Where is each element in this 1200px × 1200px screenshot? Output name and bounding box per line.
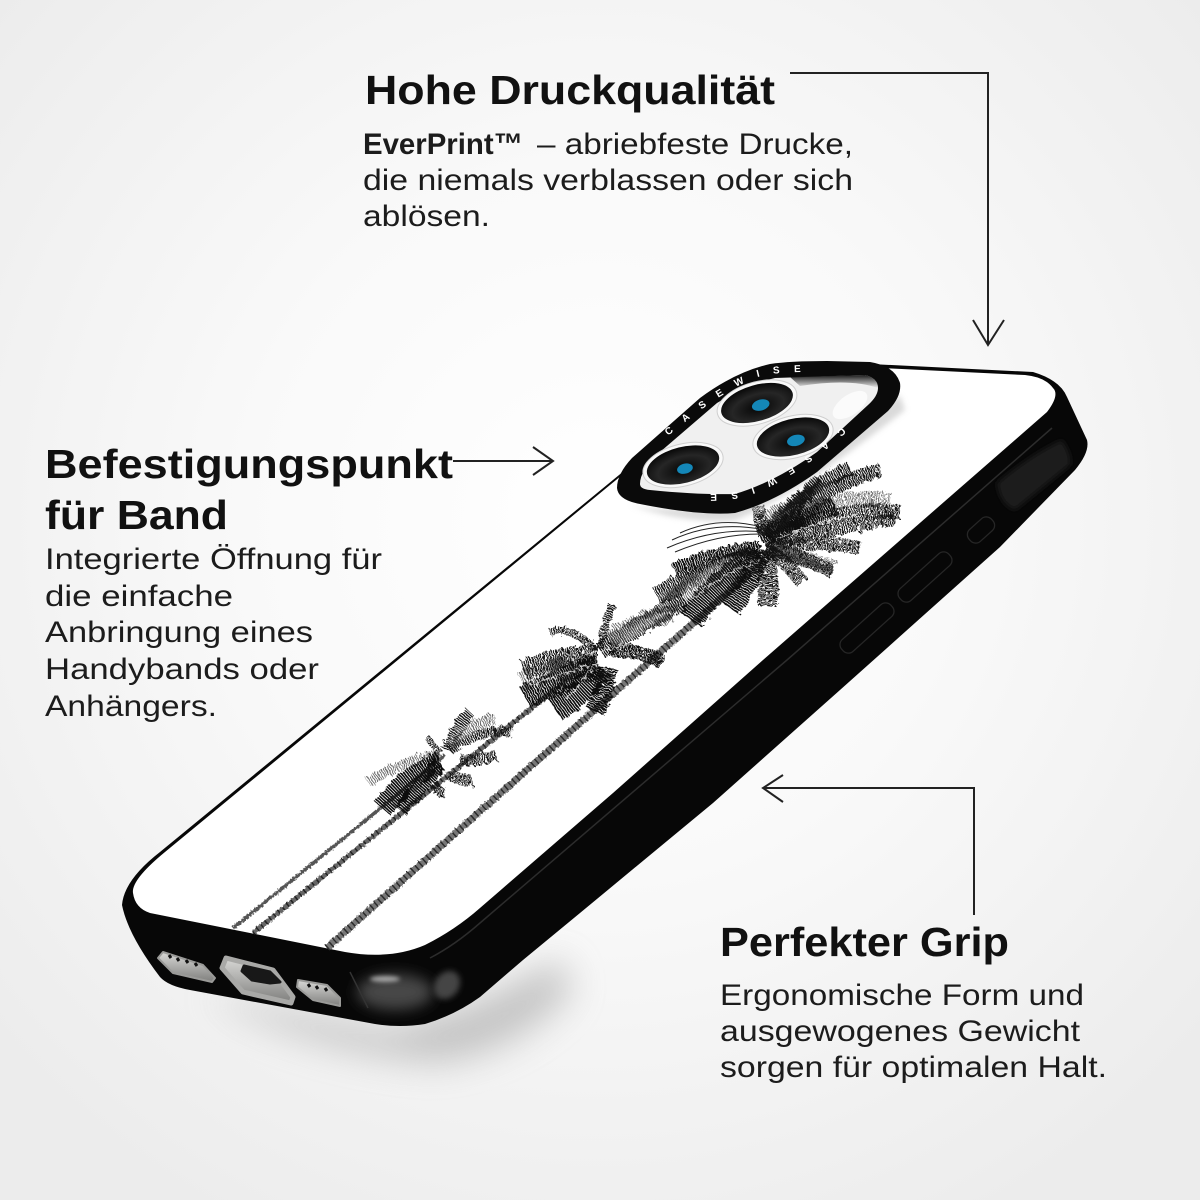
flash <box>828 385 872 425</box>
bottom ports <box>158 952 340 1006</box>
palm tree: top, thin left fronds <box>667 523 765 552</box>
arrow: to side of case <box>763 775 974 915</box>
heading: für Band <box>45 492 228 538</box>
body text <box>720 979 1107 1084</box>
callout: Hohe Druckqualität <box>363 67 853 233</box>
usb port <box>222 958 293 1003</box>
body text: Anhängers. <box>45 690 217 723</box>
camera bump <box>617 361 906 524</box>
heading: Hohe Druckqualität <box>365 67 775 113</box>
bump ring <box>617 361 900 514</box>
brand text bottom: CASEWISE <box>710 428 845 501</box>
corner highlight <box>350 966 465 1010</box>
brand text top: CASEWISE <box>665 365 800 434</box>
side buttons <box>837 514 998 656</box>
body text: ablösen. <box>363 200 490 233</box>
rim highlight <box>430 428 1052 958</box>
heading <box>45 441 453 538</box>
phone case illustration <box>122 361 1088 1078</box>
body text: EverPrint™ <box>363 128 523 161</box>
phone shadow <box>205 960 572 1062</box>
bump window <box>640 375 878 494</box>
lens left <box>638 435 728 495</box>
body text: – abriebfeste Drucke, <box>537 128 853 161</box>
body text <box>45 543 382 723</box>
body text: Integrierte Öffnung für <box>45 543 382 576</box>
arrow: to top edge <box>790 73 1004 345</box>
heading: Perfekter Grip <box>720 919 1009 965</box>
white back panel <box>133 368 1055 955</box>
arrow: to camera bump <box>453 447 553 475</box>
palm tree: middle <box>522 600 685 712</box>
window top shade <box>790 375 878 388</box>
body text: Handybands oder <box>45 653 319 686</box>
body text: sorgen für optimalen Halt. <box>720 1051 1107 1084</box>
heading: Befestigungspunkt <box>45 441 453 487</box>
body text: die niemals verblassen oder sich <box>363 164 853 197</box>
body text: Anbringung eines <box>45 616 313 649</box>
lens top <box>712 372 802 434</box>
callout: Perfekter Grip <box>720 919 1107 1084</box>
bump shadow <box>630 395 905 521</box>
case body <box>122 362 1088 1026</box>
right speaker <box>297 980 340 1006</box>
lens right <box>748 407 838 467</box>
body text: Ergonomische Form und <box>720 979 1084 1012</box>
body text: ausgewogenes Gewicht <box>720 1015 1081 1048</box>
body text <box>363 128 853 233</box>
palm trunks <box>233 560 765 948</box>
left speaker <box>158 952 215 982</box>
body text: die einfache <box>45 580 233 613</box>
callout: Befestigungspunkt für Band <box>45 441 453 723</box>
palm tree: lower <box>368 712 512 810</box>
strap slot on upper corner <box>997 440 1070 510</box>
palm tree: top <box>657 468 900 620</box>
